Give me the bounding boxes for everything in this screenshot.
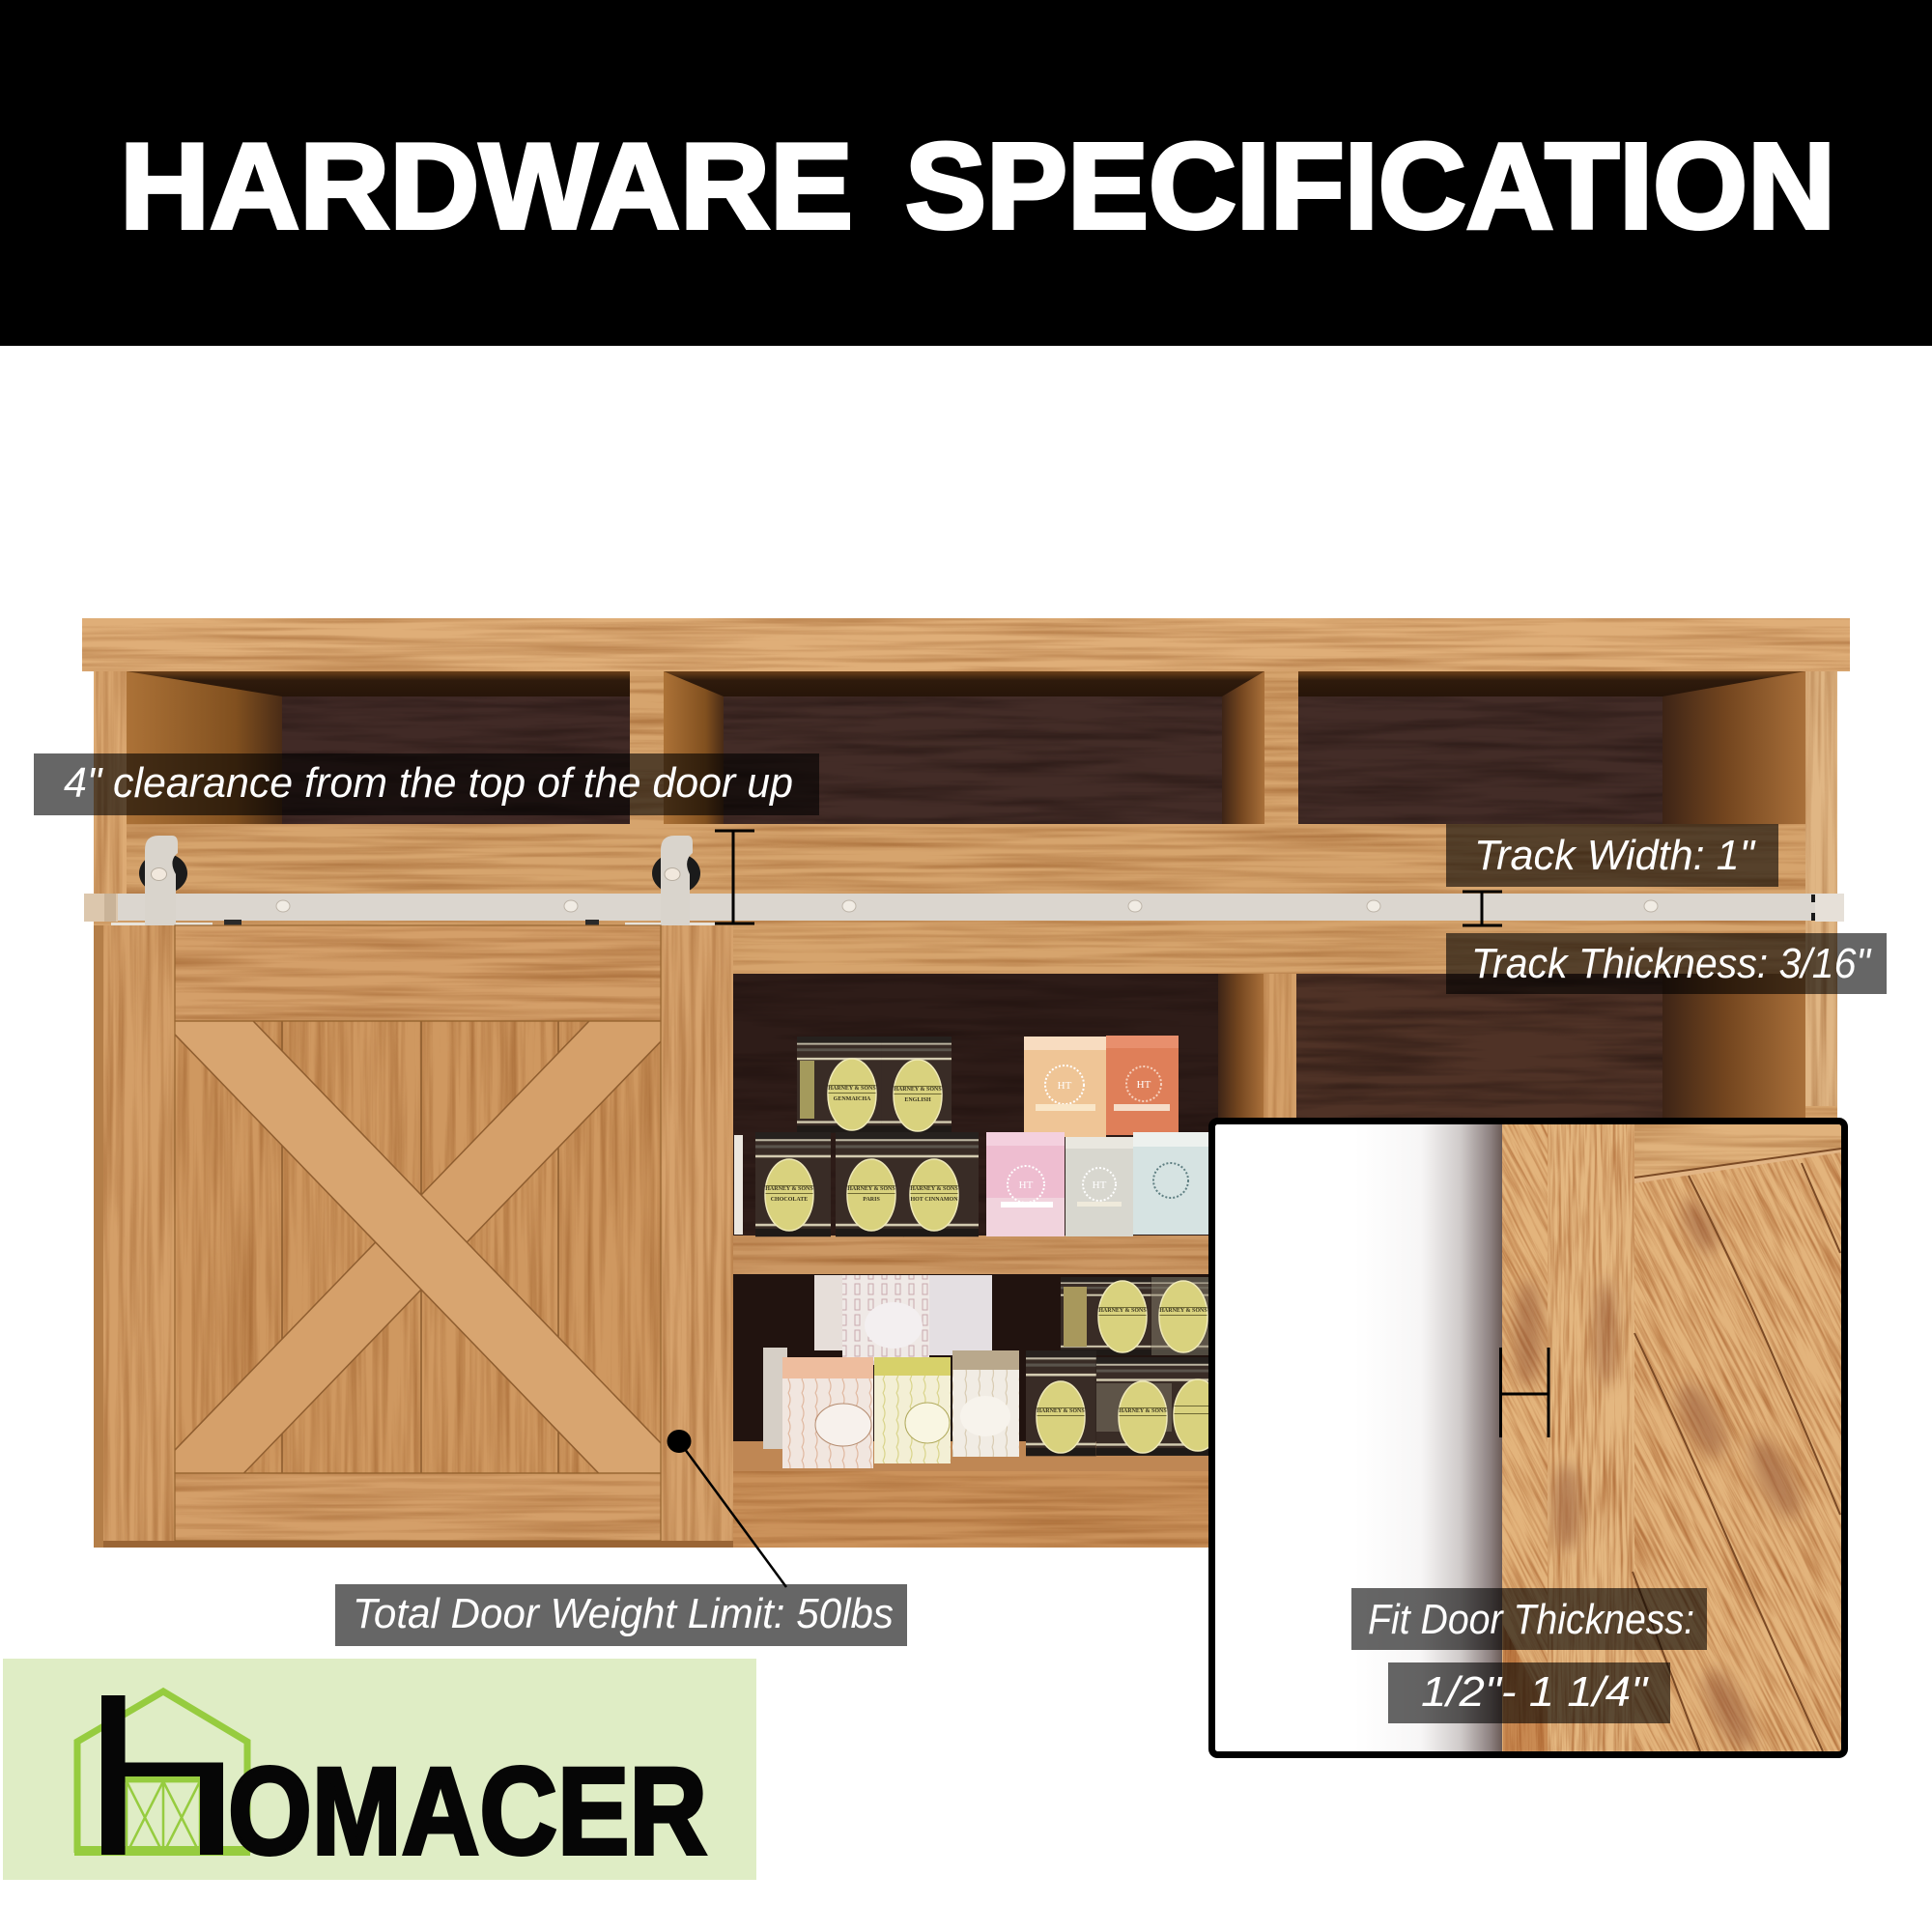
left side panel (94, 671, 127, 903)
tin: genmaicha lower: HARNEY & SONS (1098, 1308, 1147, 1314)
bottom board (733, 1471, 1211, 1548)
lower right cubby (1296, 974, 1805, 1128)
letter H (101, 1695, 223, 1855)
upper left cubby (127, 671, 630, 824)
label: door thickness range: 1/2"- 1 1/4" (1421, 1668, 1650, 1716)
x brace (176, 1022, 661, 1472)
label: clearance: 4" clearance from the top of the door up (64, 759, 793, 807)
bottom rail (175, 1473, 661, 1541)
label: fit door thickness: Fit Door Thickness: (1368, 1596, 1694, 1643)
right end stopper (1815, 894, 1844, 922)
tin: chocolate mint (755, 1132, 831, 1236)
header band (0, 0, 1932, 346)
track rail (84, 894, 1844, 926)
dimension: door thickness (1500, 1348, 1548, 1437)
plank grooves (282, 1021, 558, 1473)
barn door (103, 925, 733, 1543)
right side panel (1805, 671, 1837, 1106)
wordmark: OMACER (228, 1743, 707, 1881)
tin: paris lower: HARNEY & SONS (1119, 1408, 1167, 1414)
tin: back left grey (763, 1348, 787, 1449)
label: door thickness range (1388, 1662, 1670, 1723)
tin: light blue (1133, 1132, 1208, 1235)
dimension: track width (1463, 892, 1502, 925)
tin: english breakfast (882, 1037, 952, 1133)
tin: pink (986, 1132, 1065, 1236)
upper middle cubby (664, 671, 1264, 824)
tin: hot cinnamon spice: HARNEY & SONS (910, 1186, 958, 1192)
label: track width: Track Width: 1" (1474, 832, 1756, 879)
title (120, 118, 1835, 254)
door shadow gradient (1354, 1124, 1502, 1751)
rail bar (118, 894, 1815, 921)
tin: paris: PARIS (863, 1197, 880, 1203)
tin: english breakfast lower: HARNEY & SONS (1159, 1308, 1208, 1314)
tin: peach (1024, 1037, 1106, 1137)
icon: green house outline (77, 1691, 247, 1853)
tin: hot cinnamon spice: HOT CINNAMON (910, 1197, 958, 1203)
middle shelf (733, 1236, 1211, 1274)
rail bolts (276, 900, 1658, 912)
tin: genmaicha: GENMAICHA (834, 1096, 871, 1102)
house base (74, 1846, 250, 1856)
top band (1634, 1124, 1841, 1178)
weight leader line (667, 1430, 786, 1587)
knots (1515, 1196, 1809, 1755)
inset white background (1211, 1121, 1845, 1754)
tin: genmaicha lower (1061, 1277, 1151, 1355)
label: fit door thickness (1351, 1588, 1707, 1650)
logo (3, 1659, 756, 1881)
tin: genmaicha (797, 1037, 882, 1133)
left hanger (139, 836, 187, 926)
lower left cubby side (1218, 974, 1264, 1128)
tin: back white 2 (842, 1275, 929, 1365)
right stile (661, 925, 733, 1541)
title: HARDWARE (120, 118, 853, 254)
lower divider (1264, 974, 1296, 1128)
label: track thickness: Track Thickness: 3/16" (1471, 940, 1872, 987)
tin: beige (952, 1350, 1019, 1457)
tin: chocolate mint: CHOCOLATE (771, 1197, 808, 1203)
door outlines (175, 925, 661, 1541)
dimension: clearance (715, 831, 754, 923)
tea tins top shelf (734, 1036, 1208, 1236)
guide plates (111, 923, 213, 926)
tin: yellow (874, 1357, 951, 1463)
top rail (175, 925, 661, 1021)
left end stopper (84, 894, 118, 922)
tin: english breakfast: HARNEY & SONS (894, 1087, 942, 1093)
tin: chocolate mint lower: HARNEY & SONS (1037, 1408, 1085, 1414)
door edge strip (1503, 1625, 1548, 1751)
bottom compartment floor (733, 1441, 1211, 1473)
tin: english breakfast lower (1151, 1277, 1211, 1355)
tin: peach white (782, 1357, 873, 1468)
label: weight limit: Total Door Weight Limit: 50lbs (353, 1590, 894, 1637)
tin: peach: HT (1058, 1080, 1072, 1092)
door panel planks (175, 1021, 661, 1473)
detail inset (1208, 1118, 1848, 1758)
right hanger (652, 836, 700, 926)
tin: grey: HT (1093, 1179, 1107, 1191)
tin: hot cinnamon spice (903, 1132, 979, 1236)
tin: grey (1065, 1137, 1133, 1236)
logo background (3, 1659, 756, 1880)
stile (1548, 1124, 1634, 1751)
base shadow (94, 1541, 733, 1548)
bottom compartment back (733, 1274, 1211, 1463)
tin: paris: HARNEY & SONS (847, 1186, 895, 1192)
tin: chocolate mint lower (1026, 1350, 1096, 1456)
diagonal boards (1502, 1124, 1841, 1751)
tin: coral (1106, 1036, 1179, 1135)
tin: small white (734, 1135, 743, 1235)
inset border (1211, 1121, 1845, 1754)
plank seams (1633, 1149, 1841, 1751)
title: SPECIFICATION (905, 118, 1835, 254)
lower left cubby back (733, 974, 1218, 1236)
cabinet (82, 618, 1850, 1548)
upper right cubby (1298, 671, 1805, 824)
tea tins bottom shelf (763, 1275, 1222, 1468)
cabinet body (94, 657, 1837, 1548)
left stile (103, 925, 175, 1541)
tin: english breakfast: ENGLISH (904, 1097, 931, 1103)
tin: paris lower (1096, 1357, 1172, 1456)
tin: genmaicha: HARNEY & SONS (828, 1086, 876, 1092)
top board (82, 618, 1850, 671)
tin: pink: HT (1019, 1179, 1034, 1191)
tin: hot cinnamon lower (1172, 1357, 1222, 1456)
tin: chocolate mint: HARNEY & SONS (765, 1186, 813, 1192)
label: track width (1446, 824, 1778, 887)
left edge shadow (94, 925, 103, 1548)
tin: paris (836, 1132, 904, 1236)
tin: coral: HT (1137, 1079, 1151, 1091)
icon: barn door (118, 1777, 205, 1854)
tin: back white 1 (814, 1275, 843, 1350)
tin: back white 3 (929, 1275, 992, 1355)
inset wood close-up (1502, 1124, 1841, 1751)
